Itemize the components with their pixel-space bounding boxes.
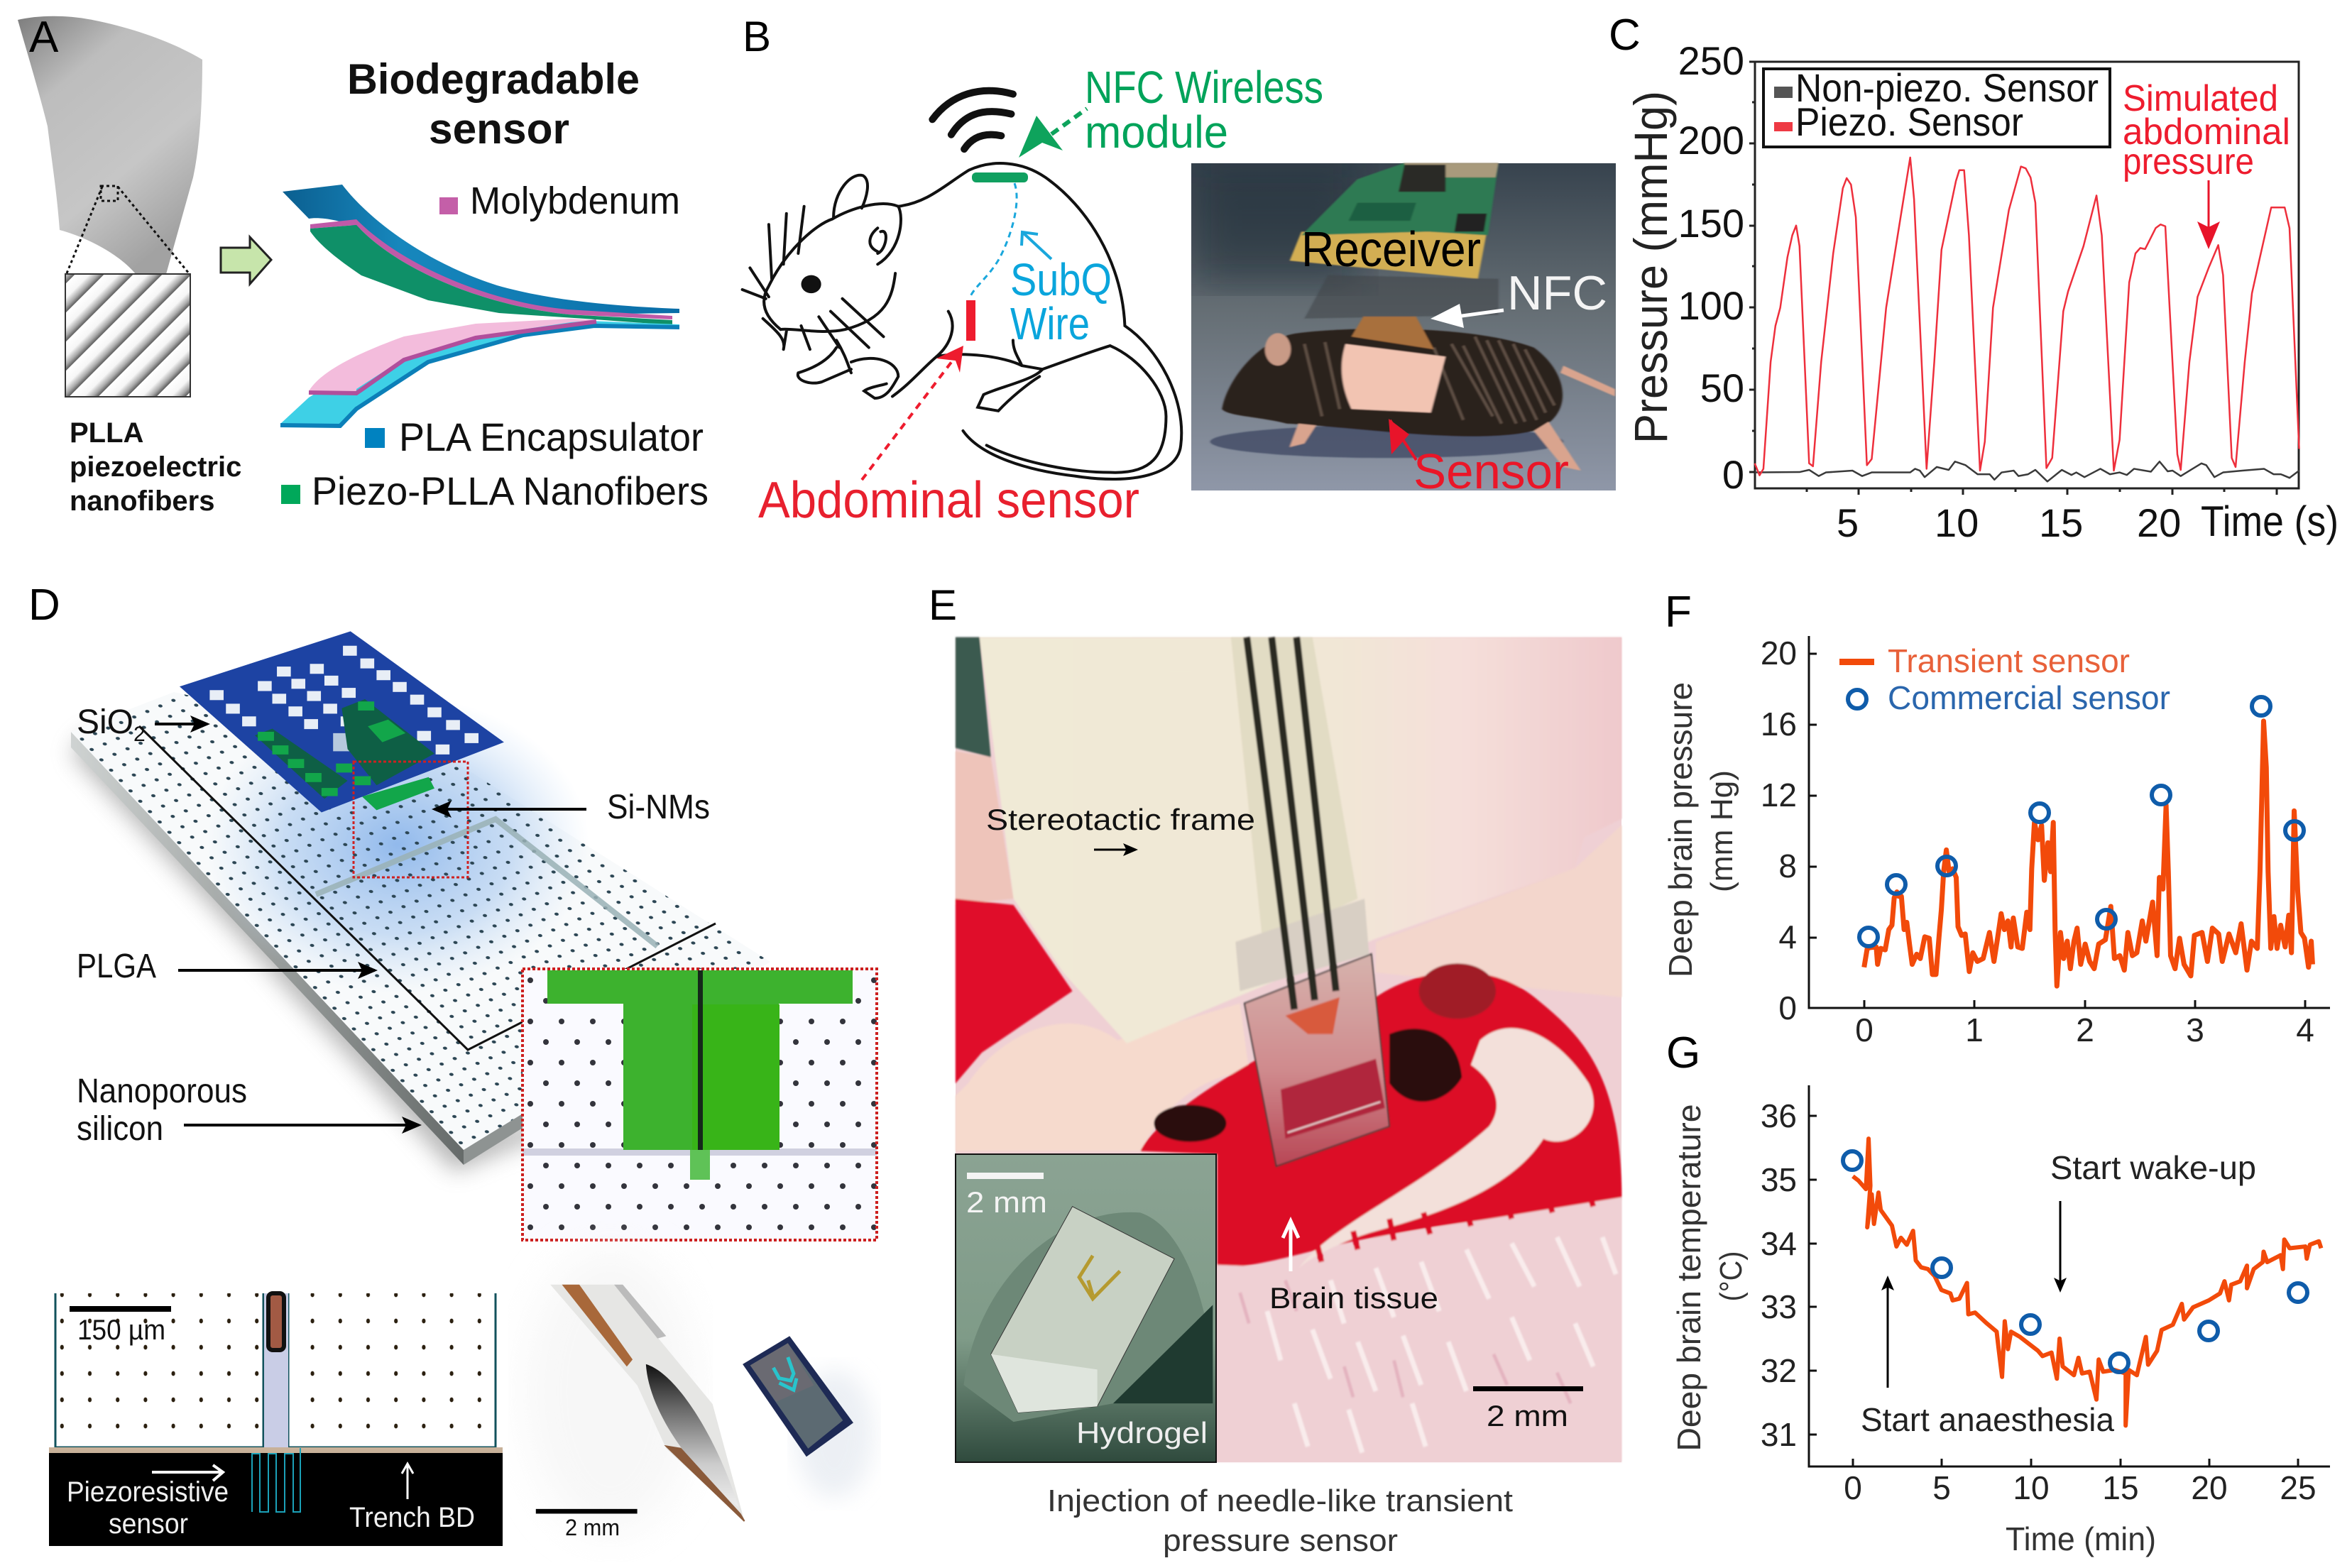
x numbers: 0 <box>1855 1011 1874 1048</box>
PLLA caption: nanofibers <box>70 486 214 517</box>
panel D: nanoporous silicon sensor <box>28 581 877 1546</box>
panel F: deep brain pressure chart <box>1662 588 2330 1048</box>
PLLA caption: PLLA <box>70 417 143 449</box>
mouse line drawing <box>743 91 1181 479</box>
PLLA caption: piezoelectric <box>70 451 241 483</box>
x numbers: 10 <box>2013 1469 2050 1506</box>
blue glow <box>206 696 589 994</box>
x title: Time (min) <box>2006 1520 2156 1557</box>
y-axis numbers: 100 <box>1678 283 1744 328</box>
SiO2 label: SiO <box>77 703 133 741</box>
silicon slab <box>71 692 770 1165</box>
stereotactic arrow <box>1094 849 1136 850</box>
label D: D <box>28 581 60 630</box>
upper molybdenum layer <box>310 219 672 319</box>
y-axis numbers: 250 <box>1678 38 1744 83</box>
axes <box>1809 1085 2330 1466</box>
Nanoporous silicon label: silicon <box>77 1110 163 1148</box>
x-axis numbers: 10 <box>1935 500 1979 545</box>
needle scale label: 2 mm <box>565 1515 620 1540</box>
label B: B <box>743 13 771 60</box>
label G: G <box>1666 1029 1700 1078</box>
annotation: abdominal <box>2123 111 2290 153</box>
piezoresistive label: Piezoresistive <box>67 1476 229 1508</box>
y-axis numbers: 150 <box>1678 201 1744 246</box>
x numbers: 4 <box>2296 1011 2314 1048</box>
red dotted box <box>354 762 468 877</box>
y units: (mm Hg) <box>1705 770 1739 892</box>
annotation: Simulated <box>2123 78 2278 119</box>
sensor photo label <box>1389 419 1569 499</box>
x-axis numbers: 20 <box>2137 500 2181 545</box>
legend box: Piezo. Sensor <box>1795 99 2023 144</box>
white arrow <box>152 1465 223 1481</box>
start wake-up: Start wake-up <box>2050 1149 2256 1186</box>
photo of mouse <box>1191 163 1616 499</box>
NFC module bar <box>972 172 1028 182</box>
blue arrow <box>1022 232 1051 259</box>
y numbers: 16 <box>1761 706 1797 742</box>
SubQ label: Wire <box>1010 298 1090 349</box>
Nanoporous arrow <box>184 1124 419 1126</box>
x-axis numbers: 5 <box>1837 500 1859 545</box>
orange trace <box>1853 1139 2321 1425</box>
red dashed arrow <box>862 346 963 480</box>
y numbers: 20 <box>1761 635 1797 671</box>
photo scale bar <box>1473 1386 1583 1391</box>
PLGA arrow <box>178 969 375 972</box>
inset scale bar <box>967 1173 1044 1179</box>
SubQ wire <box>969 183 1017 299</box>
y numbers: 33 <box>1761 1288 1797 1325</box>
x numbers: 0 <box>1844 1469 1862 1506</box>
SubQ label: SubQ <box>1010 254 1112 305</box>
caption: pressure sensor <box>1163 1523 1398 1558</box>
piezoresistive label: sensor <box>109 1508 188 1540</box>
recess <box>316 819 657 946</box>
x numbers: 2 <box>2076 1011 2094 1048</box>
dotted zoom lines <box>67 186 189 273</box>
y numbers: 4 <box>1778 919 1797 955</box>
y numbers: 35 <box>1761 1161 1797 1198</box>
legend molybdenum: Molybdenum <box>470 180 680 222</box>
y-axis numbers: 0 <box>1722 452 1744 497</box>
scale bar <box>70 1306 171 1312</box>
panel E: surgical photo <box>929 581 1621 1558</box>
x-axis numbers: 15 <box>2039 500 2083 545</box>
legend box: Non-piezo. Sensor <box>1795 65 2099 110</box>
x numbers: 25 <box>2280 1469 2317 1506</box>
meander <box>252 1448 300 1512</box>
legend commercial: Commercial sensor <box>1888 679 2170 716</box>
upper green layer <box>310 225 672 325</box>
zoomed inset <box>523 969 877 1240</box>
blue circle markers <box>1859 697 2304 946</box>
x numbers: 20 <box>2191 1469 2228 1506</box>
shadow <box>71 731 611 1171</box>
legend transient: Transient sensor <box>1888 642 2130 679</box>
x numbers: 3 <box>2186 1011 2204 1048</box>
lower pink layer <box>309 319 596 393</box>
y-axis numbers: 50 <box>1700 366 1744 410</box>
PLGA outline <box>139 726 716 1050</box>
y numbers: 8 <box>1778 848 1797 884</box>
panel G: deep brain temperature chart <box>1666 1029 2330 1557</box>
lower cyan edge <box>280 326 679 426</box>
trench label: Trench BD <box>349 1502 475 1533</box>
up arrow <box>402 1464 413 1499</box>
SiO2 arrow <box>155 723 207 725</box>
start anaesthesia: Start anaesthesia <box>1861 1401 2114 1438</box>
SiO2 label: 2 <box>133 723 146 746</box>
caption: Injection of needle-like transient <box>1047 1484 1513 1518</box>
label E: E <box>929 581 957 629</box>
y numbers: 31 <box>1761 1416 1797 1453</box>
axis ticks <box>1749 62 2277 495</box>
y numbers: 34 <box>1761 1225 1797 1262</box>
annotation: pressure <box>2123 141 2254 182</box>
NFC label: module <box>1085 106 1228 158</box>
NFC label: NFC Wireless <box>1085 62 1323 113</box>
orange trace <box>1864 721 2312 986</box>
x numbers: 15 <box>2102 1469 2139 1506</box>
scale label: 150 µm <box>77 1315 165 1346</box>
axes <box>1809 636 2330 1008</box>
NFC photo label: NFC <box>1507 266 1607 320</box>
photo <box>956 637 1621 1462</box>
needle and chip <box>525 1249 873 1540</box>
lower pink edge <box>309 322 596 393</box>
Si-NMs arrow <box>434 808 586 811</box>
SiO2 chip <box>180 631 504 813</box>
y units: (°C) <box>1714 1251 1749 1302</box>
abdominal sensor bar <box>966 300 975 341</box>
plot frame <box>1755 62 2299 488</box>
legend Piezo-PLLA: Piezo-PLLA Nanofibers <box>312 468 709 513</box>
photo scale label: 2 mm <box>1487 1399 1568 1432</box>
Nanoporous silicon label: Nanoporous <box>77 1073 247 1110</box>
y numbers: 36 <box>1761 1097 1797 1134</box>
abdominal sensor label: Abdominal sensor <box>758 472 1139 529</box>
y title: Deep brain temperature <box>1670 1104 1707 1451</box>
y-axis numbers: 200 <box>1678 118 1744 163</box>
title: sensor <box>429 105 569 153</box>
panel A: biodegradable sensor <box>18 13 709 517</box>
label F: F <box>1665 588 1692 637</box>
PLGA label: PLGA <box>77 948 156 985</box>
y title: Deep brain pressure <box>1662 682 1699 977</box>
y numbers: 12 <box>1761 777 1797 813</box>
label A: A <box>29 13 59 62</box>
sensor photo label: Sensor <box>1413 444 1569 499</box>
y-axis title: Pressure (mmHg) <box>1624 91 1677 444</box>
hydrogel label: Hydrogel <box>1076 1416 1208 1449</box>
nanofiber sheet <box>18 16 202 274</box>
legend box <box>1763 65 2110 147</box>
data lines <box>1755 158 2299 481</box>
micrograph <box>49 1293 503 1546</box>
Si-NMs label: Si-NMs <box>607 789 710 826</box>
inset scale label: 2 mm <box>966 1185 1047 1219</box>
y numbers: 32 <box>1761 1352 1797 1389</box>
NFC photo label <box>1431 266 1607 328</box>
upper blue layer <box>283 185 679 314</box>
annotation <box>2123 78 2290 249</box>
y numbers: 0 <box>1778 989 1797 1026</box>
label C: C <box>1609 11 1641 60</box>
stereotactic label: Stereotactic frame <box>986 803 1255 836</box>
panel C: pressure chart <box>1609 11 2339 545</box>
striped nanofiber square <box>65 274 190 397</box>
brain tissue label: Brain tissue <box>1269 1281 1438 1315</box>
x numbers: 1 <box>1965 1011 1984 1048</box>
green dashed arrow <box>1019 109 1087 158</box>
lower cyan layer <box>280 321 679 427</box>
brain tissue arrow <box>1283 1221 1298 1271</box>
receiver label: Receiver <box>1301 221 1481 277</box>
legend PLA encapsulator: PLA Encapsulator <box>399 415 704 459</box>
title: Biodegradable <box>347 55 640 103</box>
x numbers: 5 <box>1932 1469 1951 1506</box>
green arrow <box>221 237 271 284</box>
panel B: wireless mouse sensor <box>743 13 1616 529</box>
x-axis title: Time (s) <box>2201 498 2339 545</box>
hydrogel inset <box>956 1154 1216 1462</box>
blue circle markers <box>1843 1151 2307 1372</box>
